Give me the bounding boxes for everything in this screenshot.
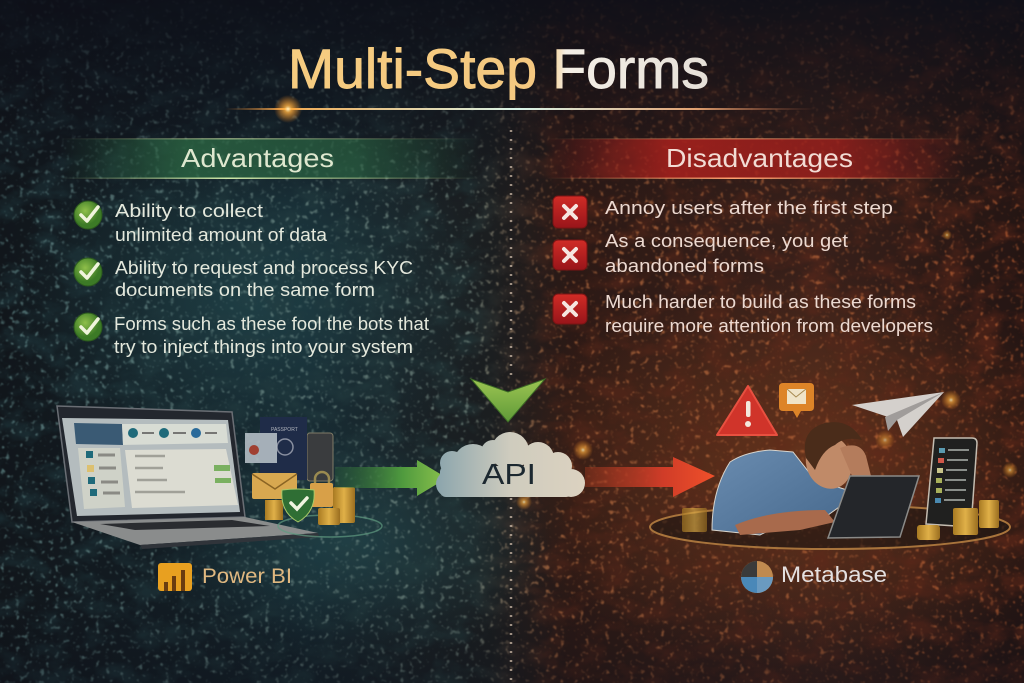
arrow: green to API xyxy=(335,460,447,496)
panel: advantages xyxy=(60,138,480,357)
icon: green down arrow xyxy=(471,379,545,422)
logo: Power BI: Power BI xyxy=(202,565,292,588)
advantage 1: Ability to collect xyxy=(115,200,263,221)
laptop xyxy=(828,476,919,538)
center dotted divider xyxy=(510,130,512,683)
disadvantage 2: abandoned forms xyxy=(605,255,764,276)
shirt xyxy=(712,450,847,535)
icon: paper airplane xyxy=(852,392,944,437)
title underline with flare xyxy=(225,95,815,123)
hair xyxy=(805,422,862,470)
disadvantages heading banner: Disadvantages xyxy=(666,143,853,173)
shield xyxy=(282,489,314,522)
icon: Metabase pie xyxy=(741,561,773,593)
advantages heading banner xyxy=(60,138,480,179)
illustration: stressed man at laptop xyxy=(712,422,919,538)
advantages heading banner: Advantages xyxy=(181,143,334,173)
advantage 1: unlimited amount of data xyxy=(115,224,328,245)
illustration: phone with list xyxy=(926,438,977,527)
hand on head xyxy=(840,445,871,476)
passport xyxy=(260,417,307,480)
phone xyxy=(307,433,333,481)
arrow: red from API xyxy=(585,457,715,497)
icon: Power BI xyxy=(158,563,192,591)
disadvantage 3: Much harder to build as these forms xyxy=(605,291,916,312)
disadvantage 1: Annoy users after the first step xyxy=(605,197,893,218)
advantage 2: Ability to request and process KYC xyxy=(115,257,413,278)
illustration: KYC documents, envelope, shield, lock and coins xyxy=(245,417,382,537)
disadvantage 3: require more attention from developers xyxy=(605,315,933,336)
illustration: table ring xyxy=(650,505,1010,549)
icon: API cloud xyxy=(436,432,585,497)
lock xyxy=(310,472,333,507)
advantage 2 xyxy=(74,257,413,300)
advantage 3: try to inject things into your system xyxy=(114,336,413,357)
head xyxy=(800,430,858,494)
orbit ring xyxy=(278,515,382,537)
advantage 2: documents on the same form xyxy=(115,279,375,300)
id card xyxy=(245,433,277,463)
logo: Metabase xyxy=(741,561,887,593)
envelope xyxy=(252,473,297,499)
illustration: KYC documents, envelope, shield, lock and coins: PASSPORT xyxy=(271,427,298,433)
panel: disadvantages xyxy=(545,138,965,336)
coins xyxy=(265,487,355,525)
icon: API cloud: API xyxy=(482,459,536,491)
advantage 1 xyxy=(74,200,328,245)
disadvantage 2 xyxy=(553,230,848,276)
disadvantage 3 xyxy=(553,291,933,336)
coins stacks xyxy=(682,500,999,540)
advantage 3 xyxy=(74,313,429,357)
icon: warning triangle xyxy=(717,386,777,435)
disadvantages heading banner xyxy=(545,138,965,179)
title: Multi-Step Forms xyxy=(288,37,709,100)
illustration: laptop with form xyxy=(57,406,319,549)
logo: Metabase: Metabase xyxy=(781,562,887,587)
disadvantage 2: As a consequence, you get xyxy=(605,230,848,251)
disadvantage 1 xyxy=(553,196,893,228)
advantage 3: Forms such as these fool the bots that xyxy=(114,313,429,334)
logo: Power BI xyxy=(158,563,292,591)
forearm xyxy=(735,510,835,535)
icon: email badge xyxy=(779,383,814,418)
